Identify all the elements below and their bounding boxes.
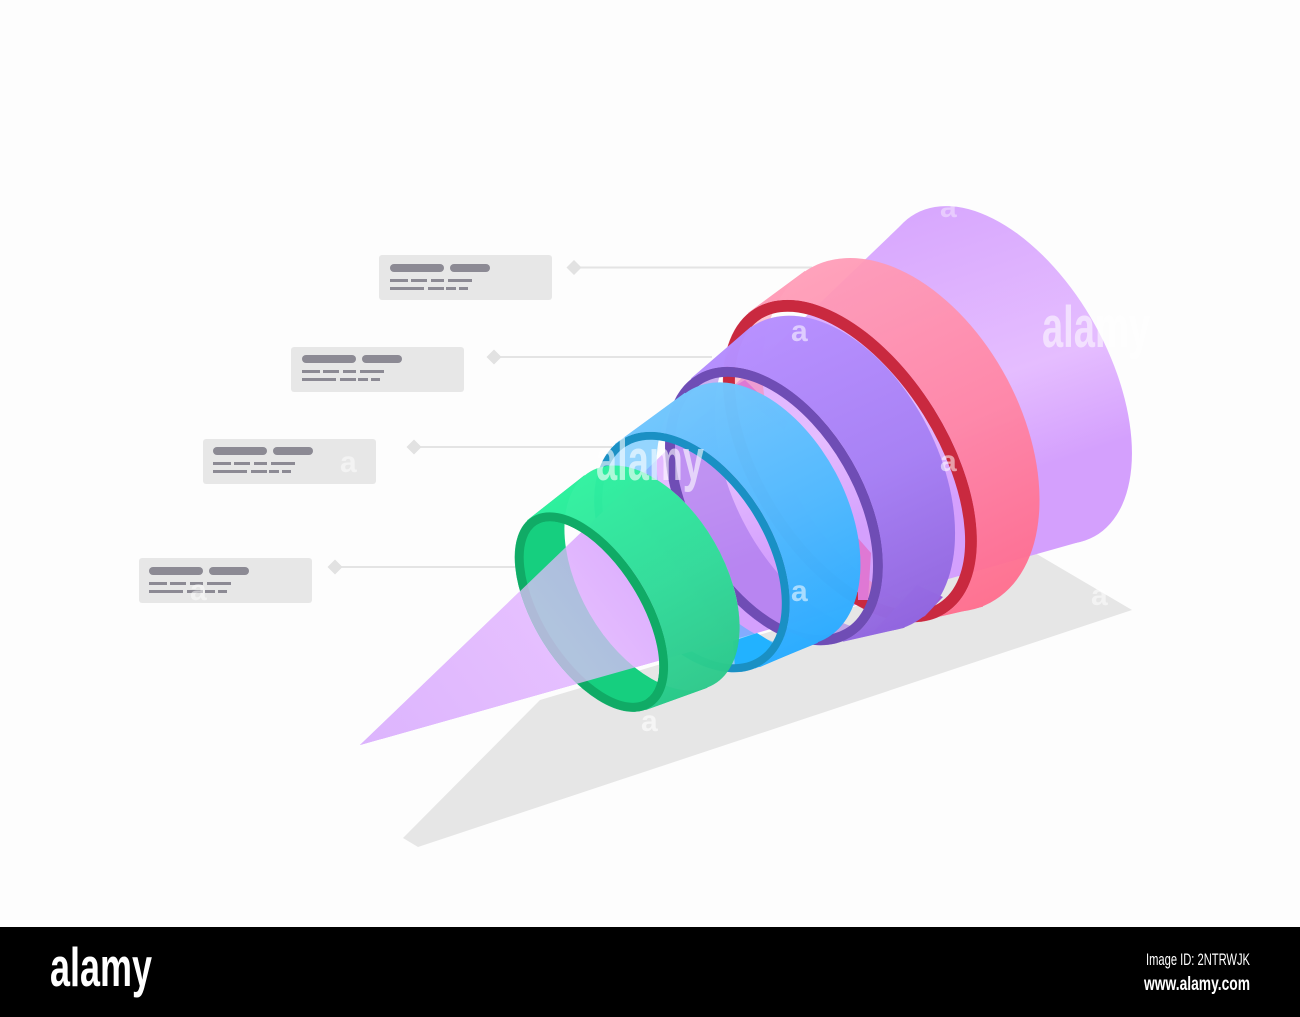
watermarks: a [791,575,808,608]
watermarks: alamy [1042,295,1150,360]
ring: green outer band and near rim [515,466,740,712]
footer bar [0,927,1300,1017]
footer logo: alamy [50,936,152,998]
leader lines and diamonds [328,260,812,574]
cone tip in front of the rings [360,474,740,745]
ring: blue [600,382,860,672]
watermarks: a [940,445,957,478]
footer image id: Image ID: 2NTRWJK [1146,950,1250,969]
label card 2 [291,347,464,392]
watermarks: a [641,705,658,738]
label card 4 [139,558,312,603]
ground shadow [403,553,1132,847]
footer url: www.alamy.com [1143,974,1250,995]
watermarks [190,191,1150,738]
ring: purple [665,316,955,646]
watermarks: a [1091,579,1108,612]
watermarks: a [940,191,957,224]
central cone [355,200,1140,750]
label card 1 [379,255,552,300]
watermarks: a [190,574,207,607]
ring: red [722,258,1040,622]
pink reflections inside purple rim [733,380,871,600]
label card 3 [203,439,376,484]
watermarks: alamy [596,428,704,493]
watermarks: a [340,446,357,479]
ring: green inner wall and rim [514,466,740,712]
purple band lower overlap [873,585,943,632]
cone tip overlay across green wall [520,474,740,684]
watermarks: a [791,315,808,348]
